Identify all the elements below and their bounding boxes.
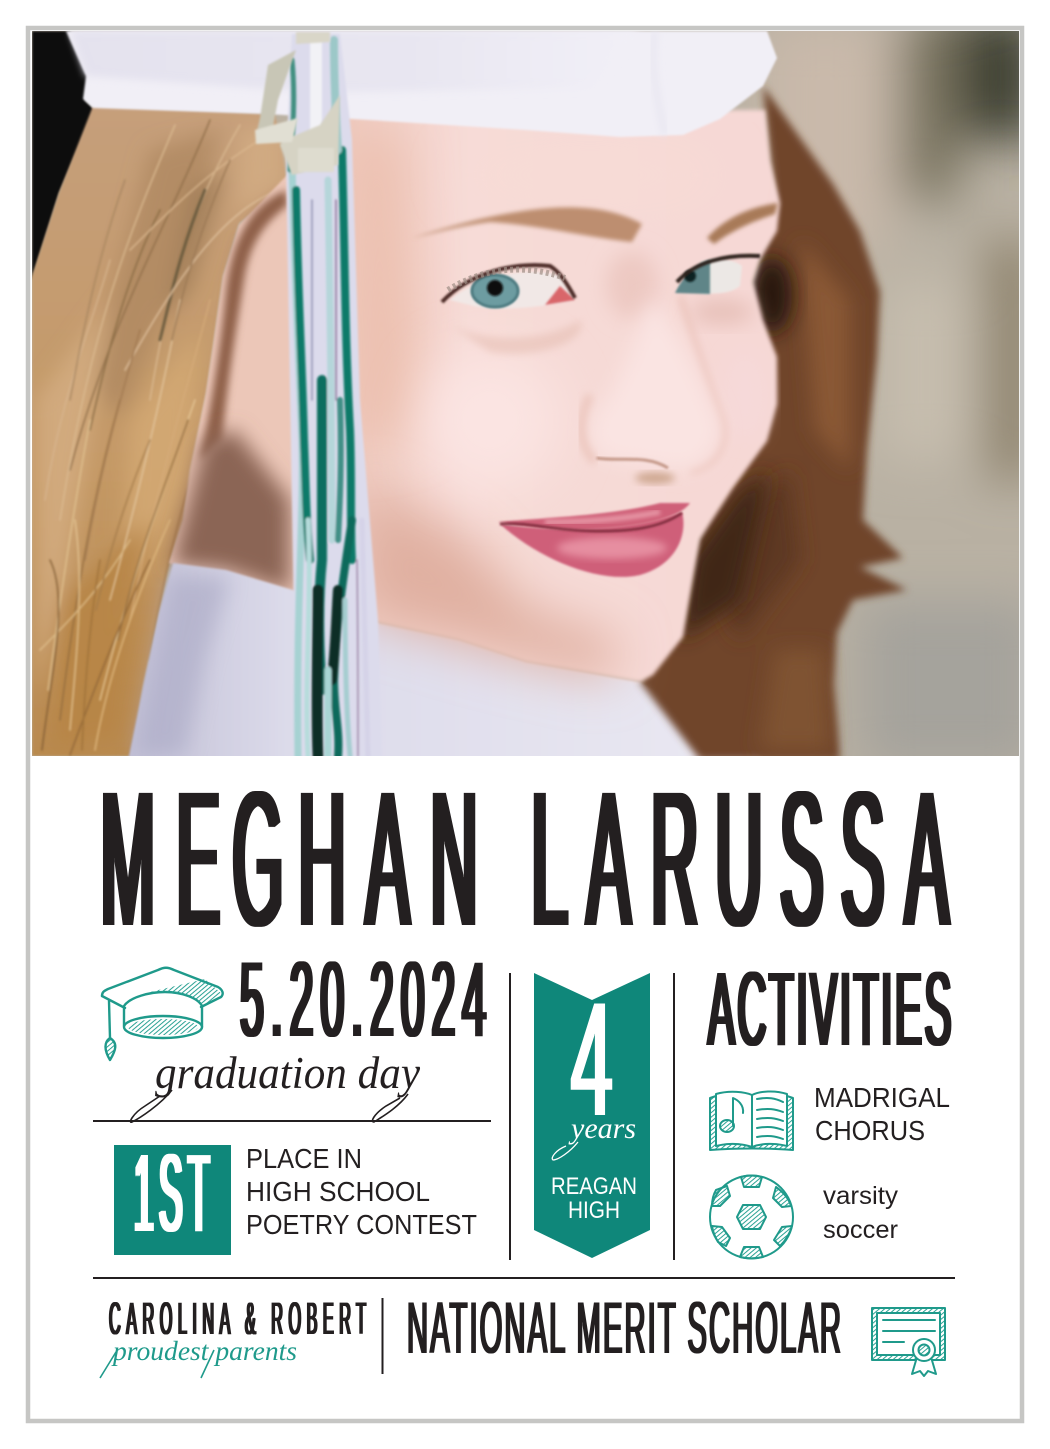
gown collar (128, 563, 768, 760)
photo backdrop (32, 31, 1019, 756)
school name: HIGH (568, 1197, 620, 1224)
left eye (442, 265, 575, 309)
last name: LARUSSA (531, 752, 949, 967)
neck shadow (172, 430, 290, 592)
badge square (114, 1145, 231, 1255)
nose right shade (680, 296, 724, 472)
board front edge (102, 996, 125, 1008)
years swash (552, 1142, 578, 1160)
lips (498, 503, 690, 577)
lower divider (93, 1277, 955, 1279)
madrigal chorus text: CHORUS (815, 1115, 925, 1146)
proudest parents script: proudest parents (111, 1336, 297, 1366)
left page (716, 1092, 752, 1147)
right hair lights (730, 252, 856, 750)
numeral 4: 4 (571, 969, 612, 1150)
date: 5.20.2024 (240, 940, 486, 1060)
iris rim (472, 275, 518, 307)
lower face shading (355, 480, 620, 680)
years script: years (568, 1112, 636, 1145)
hair tonal shading (36, 125, 285, 750)
divider under date (93, 1120, 491, 1122)
icon: music book (710, 1091, 793, 1150)
hair mass (32, 106, 288, 756)
cap top shade (70, 31, 640, 92)
left eyebrow (412, 207, 642, 242)
tassel end (106, 1038, 115, 1060)
badge text: 1ST (134, 1133, 210, 1255)
name heading (101, 752, 949, 967)
nose shape (582, 296, 724, 484)
seal center (918, 1344, 930, 1356)
left hair (32, 106, 288, 756)
contest text: HIGH SCHOOL (246, 1176, 430, 1207)
school name (551, 1173, 637, 1224)
right pupil (684, 270, 696, 282)
cap crease (653, 31, 665, 135)
socket between eyes (606, 251, 658, 319)
under-nose shadow (635, 472, 675, 484)
parents names: CAROLINA & ROBERT (109, 1294, 366, 1345)
vertical divider bottom (382, 1298, 384, 1374)
graduation cap in photo (66, 31, 777, 137)
certificate inner (877, 1313, 940, 1355)
contest text: PLACE IN (246, 1143, 362, 1174)
top patch (741, 1176, 762, 1187)
right iris (675, 260, 710, 294)
right hair (640, 86, 907, 760)
right cheek (770, 382, 780, 432)
side of face and neck (169, 170, 300, 600)
cheek highlight (404, 364, 544, 474)
varsity soccer text (823, 1182, 899, 1244)
first place badge (114, 1133, 231, 1255)
years script (552, 1112, 636, 1160)
varsity soccer text: varsity (823, 1182, 899, 1210)
icon: graduation cap (102, 968, 223, 1060)
proudest parents script (100, 1336, 297, 1378)
center hexagon (737, 1205, 766, 1229)
contest text: POETRY CONTEST (246, 1209, 477, 1240)
ribbon tails (912, 1357, 936, 1376)
nose left shade (582, 395, 595, 462)
temple shading (350, 130, 420, 450)
page lines (757, 1098, 783, 1139)
board hatching (150, 979, 222, 1006)
dark corner behind cap (32, 31, 95, 280)
vertical divider left (509, 973, 511, 1260)
vertical divider right (673, 973, 675, 1260)
tassel cord (109, 1001, 110, 1038)
band hatching (128, 1019, 198, 1035)
gown fill (128, 563, 768, 760)
activities heading: ACTIVITIES (708, 950, 951, 1067)
shadow along hair (200, 190, 288, 460)
national merit scholar: NATIONAL MERIT SCHOLAR (407, 1287, 841, 1369)
ball outline (710, 1176, 793, 1258)
under right eye shadow (690, 300, 754, 324)
graduation date block (102, 940, 486, 1122)
face base (300, 110, 780, 682)
book covers (710, 1096, 793, 1150)
tassel charm (255, 32, 340, 175)
ribbon: four years (534, 969, 650, 1258)
right eye white (700, 259, 742, 293)
right page (752, 1091, 787, 1147)
lower right patch (774, 1226, 792, 1246)
temple skin (169, 170, 300, 600)
face (300, 110, 780, 682)
lip highlight (557, 537, 667, 559)
lash fringe (448, 269, 565, 290)
dark hair near eye (752, 257, 792, 333)
script swashes (100, 1350, 214, 1378)
bottom patch (740, 1247, 763, 1258)
script swashes (131, 1090, 172, 1122)
tassel (255, 32, 382, 756)
cap shape (66, 31, 777, 137)
seal (913, 1339, 935, 1361)
lower left patch (712, 1226, 730, 1246)
hair strands (40, 120, 280, 755)
dark hair near jaw (680, 470, 770, 640)
lip line (500, 513, 682, 531)
eye corner (545, 286, 575, 305)
pupil (487, 280, 503, 296)
band sides (124, 992, 202, 1027)
iris (471, 274, 519, 308)
right eye (675, 256, 760, 294)
upper right patch (773, 1187, 791, 1207)
upper lip (498, 503, 690, 530)
graduation day script (131, 1048, 420, 1122)
nostril shadow (596, 458, 668, 468)
ribbon shape (534, 973, 650, 1258)
madrigal chorus text: MADRIGAL (814, 1082, 950, 1113)
icon: soccer ball (710, 1176, 793, 1258)
right hair mass (640, 86, 907, 760)
varsity soccer text: soccer (823, 1216, 898, 1244)
band bottom ellipse (124, 1016, 202, 1038)
forehead tone (460, 151, 720, 199)
certificate frame (872, 1308, 945, 1360)
lower lip (500, 512, 683, 577)
photo: graduate portrait (32, 10, 1040, 770)
under left eye shadow (466, 322, 582, 356)
tassel strands (290, 40, 368, 756)
upper lip light (545, 512, 660, 522)
cap board (102, 968, 223, 1007)
madrigal chorus text (814, 1082, 950, 1146)
eye white (450, 272, 574, 309)
music note (733, 1098, 743, 1126)
right eyebrow (707, 203, 778, 244)
contest text (246, 1143, 477, 1240)
nose bridge and tip (591, 300, 719, 470)
note head (720, 1120, 734, 1132)
right lash (677, 256, 760, 282)
upper left patch (712, 1186, 730, 1206)
upper lashes (442, 265, 575, 302)
parents block (100, 1294, 366, 1378)
gown shadow (135, 575, 230, 756)
tassel pale base (286, 34, 382, 756)
certificate lines (883, 1320, 935, 1342)
school name: REAGAN (551, 1173, 637, 1200)
graduation day script: graduation day (155, 1048, 420, 1098)
first name: MEGHAN (101, 752, 478, 967)
icon: diploma certificate (872, 1308, 945, 1376)
backdrop blurred tones (765, 31, 1019, 756)
